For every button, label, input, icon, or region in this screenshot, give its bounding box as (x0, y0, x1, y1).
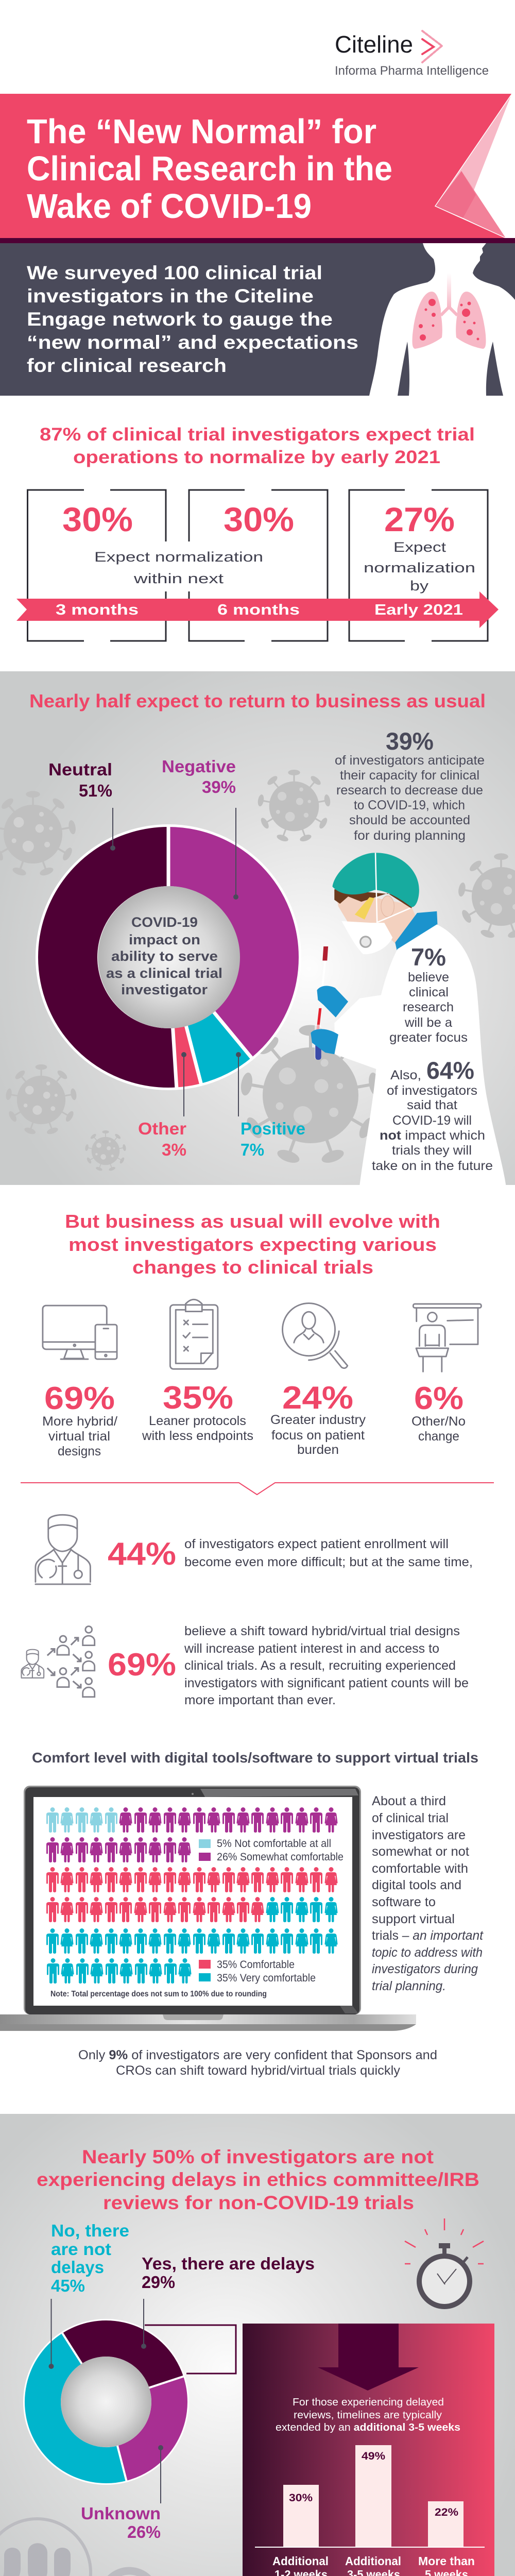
text: about a third of investigators: digital tools and (372, 1878, 461, 1892)
label: no delays 45% (51, 2221, 129, 2295)
text: delay explanation: reviews, timelines are typically (294, 2410, 442, 2421)
pictogram: row 4 comfortable and very comfortable (46, 1897, 338, 1922)
label: negative 39% (162, 757, 236, 796)
stat: 64% no impact: take on in the future (372, 1159, 493, 1173)
stat column: hybrid/virtual designs: More hybrid/ (42, 1414, 117, 1429)
label: unknown 26% (81, 2504, 161, 2541)
title: The “New Normal” for (27, 112, 376, 151)
donut centre text: impact on (129, 932, 200, 947)
pictogram: row 3 comfortable (46, 1867, 338, 1892)
illustration: scientist with test tube (311, 853, 506, 1185)
row: 69% hybrid increases interest: clinical trials. As a result, recruiting experienced (184, 1658, 456, 1673)
icon: presenter at podium (413, 1304, 481, 1371)
stat column: patient burden (270, 1303, 366, 1457)
heading: business as usual will evolve: most investigators expecting various (68, 1234, 437, 1255)
row: 69% hybrid increases interest: 69% (108, 1647, 176, 1683)
title (27, 112, 392, 226)
text: survey description: for clinical research (27, 355, 227, 376)
label: other 3%: 3% (162, 1140, 186, 1159)
connector: bracket to delays breakdown (145, 2325, 236, 2374)
stat column: leaner protocols: 35% (163, 1380, 233, 1416)
heading: business as usual will evolve: But business as usual will evolve with (65, 1211, 440, 1232)
row: 44% enrollment more difficult (36, 1515, 473, 1584)
text: delay explanation: extended by an additional 3-5 weeks (276, 2422, 460, 2433)
text: early 2021 description: normalization (364, 560, 475, 575)
stat column: leaner protocols (142, 1299, 253, 1443)
icon: clipboard (170, 1299, 218, 1369)
arrow: down into panel (318, 2324, 419, 2391)
title: Wake of COVID-19 (27, 187, 312, 226)
donut centre text: COVID-19 (131, 914, 198, 930)
stat column: hybrid/virtual designs: designs (58, 1444, 101, 1459)
text: about a third of investigators (372, 1794, 484, 1993)
stat: 39% capacity decrease: for during planning (354, 828, 466, 843)
text: about a third of investigators: trial planning. (372, 1979, 446, 1993)
text: survey description: “new normal” and expectations (27, 332, 358, 353)
row: 44% enrollment more difficult: of investigators expect patient enrollment will (184, 1537, 449, 1551)
stat: 64% no impact (372, 1057, 493, 1173)
panel: normalization timeline (16, 490, 499, 641)
arrow: timeline ribbon (16, 591, 499, 628)
heading (37, 2146, 479, 2213)
text: delay explanation (276, 2397, 460, 2433)
pictogram: row 6 very comfortable (47, 1958, 192, 1984)
stat: 7% greater focus (389, 943, 468, 1045)
text: about a third of investigators: trials – an important (372, 1928, 484, 1943)
label: other 3% (138, 1119, 186, 1159)
donut chart: COVID-19 impact (36, 824, 301, 1090)
icon: magnifier on patient (283, 1303, 348, 1368)
text: about a third of investigators: topic to address with (372, 1945, 483, 1960)
label: yes delays 29% (142, 2254, 315, 2292)
stat column: other/no change: 6% (414, 1381, 464, 1416)
label: no delays 45%: 45% (51, 2276, 85, 2295)
labels: timeline periods: 3 months (56, 602, 139, 618)
bar chart: additional weeks: 30% (289, 2492, 313, 2504)
stat: 39% capacity decrease: of investigators anticipate (335, 753, 485, 768)
legend: lower: 35% Very comfortable (217, 1972, 316, 1984)
text: early 2021 description: by (410, 578, 429, 594)
bar chart: additional weeks: Additional (345, 2554, 401, 2568)
label: negative 39%: 39% (202, 777, 236, 796)
donut centre text: as a clinical trial (106, 965, 222, 981)
pictogram: row 5 very comfortable (46, 1928, 338, 1954)
label: unknown 26%: Unknown (81, 2504, 161, 2523)
stat column: leaner protocols: Leaner protocols (149, 1414, 246, 1428)
text: about a third of investigators: software to (372, 1895, 436, 1909)
bar chart: additional weeks: 49% (362, 2450, 385, 2462)
text: about a third of investigators: comfortable with (372, 1861, 468, 1876)
label: positive 7% (241, 1119, 305, 1159)
heading: 87% expect normalization: 87% of clinical trial investigators expect trial (40, 425, 475, 445)
background viruses (0, 770, 515, 1172)
legend: upper: 26% Somewhat comfortable (217, 1851, 344, 1863)
heading: business as usual will evolve (65, 1211, 440, 1278)
stat: 39% capacity decrease: their capacity for clinical (340, 768, 479, 783)
text: only 9% very confident: Only 9% of investigators are very confident that Sponsors and (78, 2048, 437, 2062)
text: about a third of investigators: of clinical trial (372, 1811, 449, 1825)
callout lines (111, 808, 241, 1116)
text: survey description: We surveyed 100 clinical trial (27, 262, 322, 283)
stat: 64% no impact: 64% (426, 1057, 474, 1084)
label: negative 39%: Negative (162, 757, 236, 776)
text: about a third of investigators: support virtual (372, 1912, 455, 1926)
bar chart: additional weeks: Additional (272, 2554, 329, 2568)
text: about a third of investigators: investigators are (372, 1828, 466, 1842)
label: positive 7%: Positive (241, 1119, 305, 1138)
panel: delay length breakdown (243, 2324, 494, 2576)
icon: monitor and phone (43, 1306, 117, 1359)
label: yes delays 29%: Yes, there are delays (142, 2254, 315, 2273)
stat column: other/no change (411, 1304, 481, 1444)
stat: 39% capacity decrease: research to decrease due (336, 783, 483, 798)
pictogram: row 2 somewhat comfortable (46, 1837, 191, 1862)
text: early 2021 description: Expect (393, 539, 447, 555)
label: other 3%: Other (138, 1119, 186, 1138)
label: unknown 26%: 26% (127, 2522, 161, 2541)
label: yes delays 29%: 29% (142, 2273, 175, 2292)
logo: Citeline: Citeline (335, 31, 413, 58)
row: 44% enrollment more difficult: 44% (108, 1536, 176, 1572)
panel: laptop pictogram chart (0, 1786, 416, 2031)
bar chart: additional weeks: More than (418, 2554, 475, 2568)
panel: ethics committee delays (0, 2114, 515, 2576)
row: 44% enrollment more difficult: become even more difficult; but at the same time, (184, 1555, 473, 1569)
stat: 7% greater focus: clinical (409, 985, 449, 999)
legend: lower: 35% Comfortable (217, 1959, 295, 1971)
text: delay explanation: For those experiencing delayed (293, 2397, 444, 2408)
stat: 30 percent at 6 months: 30% (224, 500, 294, 538)
label: no delays 45%: delays (51, 2258, 104, 2277)
title: Clinical Research in the (27, 149, 392, 188)
stat: 64% no impact: not impact which (380, 1128, 485, 1143)
icon: body silhouette with infected lungs (369, 243, 515, 396)
laptop body (0, 1786, 416, 2031)
label: neutral 51%: 51% (79, 781, 112, 800)
row: 69% hybrid increases interest: more important than ever. (184, 1693, 336, 1707)
stat: 7% greater focus: greater focus (389, 1030, 468, 1045)
stat column: patient burden: 24% (282, 1380, 353, 1416)
text: survey description (27, 262, 358, 376)
callout lines (49, 2299, 163, 2503)
labels: timeline periods: Early 2021 (374, 602, 463, 618)
icon: stopwatch (405, 2218, 484, 2307)
label: no delays 45%: are not (51, 2240, 111, 2259)
text: survey description: investigators in the Citeline (27, 285, 314, 307)
stat: 64% no impact: Also, (390, 1068, 421, 1082)
icon: Citeline chevrons (422, 31, 442, 62)
logo: Citeline: Informa Pharma Intelligence (335, 64, 489, 78)
heading: business as usual will evolve: changes to clinical trials (132, 1257, 373, 1278)
stat: 7% greater focus: will be a (404, 1015, 452, 1030)
text: only 9% very confident: CROs can shift toward hybrid/virtual trials quickly (116, 2063, 400, 2078)
row: 69% hybrid increases interest: believe a shift toward hybrid/virtual trial designs (184, 1624, 460, 1638)
stat: 64% no impact: of investigators (387, 1083, 477, 1098)
heading: Nearly half expect to return to business as usual (29, 690, 486, 711)
labels: timeline periods (56, 602, 463, 618)
stat: 64% no impact: said that (407, 1098, 457, 1112)
text: only 9% very confident (78, 2048, 437, 2078)
text: survey description: Engage network to gauge the (27, 309, 333, 330)
heading: 87% expect normalization (40, 425, 475, 467)
panel: business as usual (0, 671, 515, 1185)
heading: 87% expect normalization: operations to normalize by early 2021 (73, 447, 440, 467)
heading: Nearly 50% of investigators are not (82, 2146, 434, 2167)
stat column: other/no change: change (418, 1429, 459, 1444)
frames: timeline boxes (28, 490, 488, 641)
pictogram: row 1 not comfortable and somewhat comfortable (46, 1807, 338, 1833)
row: 69% hybrid increases interest: will increase patient interest in and access to (184, 1641, 439, 1656)
row: 69% hybrid increases interest (21, 1624, 469, 1707)
label: neutral 51%: Neutral (48, 760, 112, 779)
stat: 39% capacity decrease: 39% (386, 727, 434, 755)
label: no delays 45%: No, there (51, 2221, 129, 2240)
stat: 27 percent by early 2021: 27% (384, 500, 455, 538)
bar chart: additional weeks: 22% (435, 2506, 458, 2518)
legend: upper: 5% Not comfortable at all (217, 1838, 331, 1850)
stat column: hybrid/virtual designs: 69% (44, 1381, 115, 1416)
heading: comfort level with digital tools: Comfort level with digital tools/software to support virtual trials (32, 1750, 478, 1766)
heading: experiencing delays in ethics committee/IRB (37, 2169, 479, 2190)
stat: 64% no impact: trials they will (392, 1143, 472, 1158)
stat column: patient burden: Greater industry (270, 1413, 366, 1427)
labels: timeline periods: 6 months (217, 602, 300, 618)
text: shared description (94, 549, 263, 586)
panel: title banner (0, 94, 512, 238)
label: neutral 51% (48, 760, 112, 800)
stat: 39% capacity decrease: to COVID-19, which (354, 798, 465, 812)
text: shared description: Expect normalization (94, 549, 263, 565)
donut centre text (106, 914, 222, 997)
text: about a third of investigators: somewhat or not (372, 1844, 469, 1859)
icon: doctor (36, 1515, 90, 1584)
row: 69% hybrid increases interest: investigators with significant patient counts will be (184, 1676, 469, 1690)
text: early 2021 description (364, 539, 475, 594)
stat: 39% capacity decrease: should be accounted (349, 813, 470, 827)
stat: 39% capacity decrease (335, 727, 485, 843)
stat: 30 percent at 3 months: 30% (62, 500, 133, 538)
stat: 7% greater focus: 7% (411, 943, 446, 971)
panel: survey intro (0, 243, 515, 396)
legend: lower (199, 1959, 316, 1984)
heading: reviews for non-COVID-19 trials (103, 2192, 414, 2213)
label: positive 7%: 7% (241, 1140, 264, 1159)
background icon: patients and magnifier (0, 2519, 157, 2576)
text: shared description: within next (133, 571, 224, 586)
text: about a third of investigators: About a third (372, 1794, 446, 1808)
stat column: hybrid/virtual designs (42, 1306, 117, 1459)
note: rounding: Note: Total percentage does not sum to 100% due to rounding (50, 1990, 267, 1998)
stat column: hybrid/virtual designs: virtual trial (48, 1429, 110, 1444)
donut centre text: ability to serve (111, 948, 218, 964)
stat: 7% greater focus: research (403, 1000, 454, 1014)
icon: doctor connected to patient network (21, 1626, 95, 1697)
stat: 7% greater focus: believe (408, 970, 449, 985)
donut chart: delays (19, 2314, 194, 2489)
bar chart: additional weeks (255, 2445, 485, 2576)
legend: upper (199, 1838, 344, 1863)
logo: Citeline (335, 31, 489, 78)
stat column: other/no change: Other/No (411, 1414, 466, 1429)
stat column: patient burden: focus on patient (271, 1428, 365, 1443)
text: about a third of investigators: investigators during (372, 1962, 478, 1976)
stat column: leaner protocols: with less endpoints (142, 1429, 253, 1443)
donut centre text: investigator (121, 982, 208, 997)
stat column: patient burden: burden (297, 1443, 339, 1457)
stat: 64% no impact: COVID-19 will (392, 1113, 472, 1128)
